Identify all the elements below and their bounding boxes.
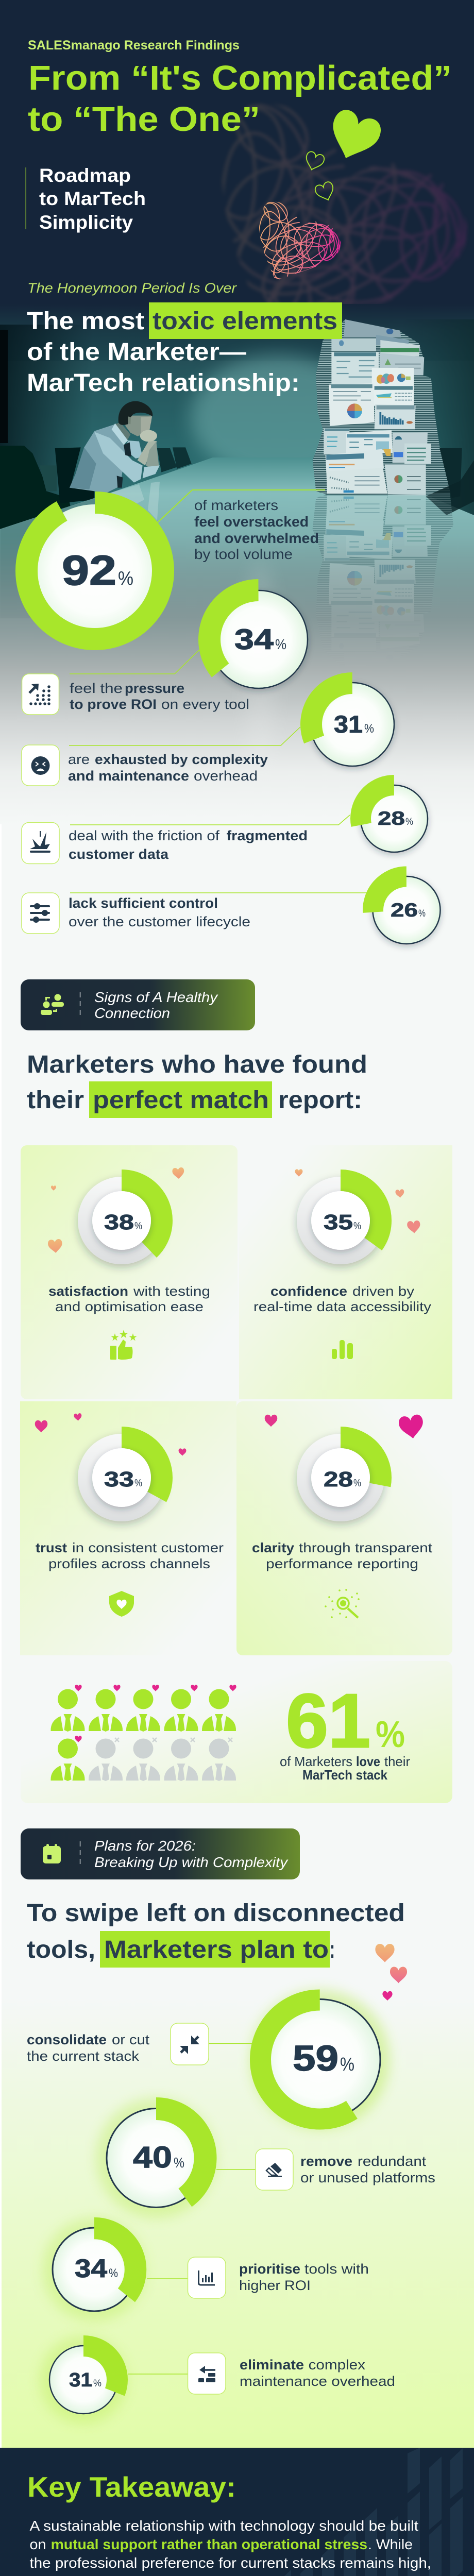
photo: overwhelmed marketer beside paper stack — [0, 304, 474, 824]
panel: 61 percent love their stack: 61 — [286, 1679, 370, 1764]
panel: key takeaway — [0, 2448, 474, 2576]
heading: toxic elements: MarTech relationship: — [27, 369, 300, 397]
stat: 34 percent pressure to prove ROI — [22, 570, 328, 715]
heading: swipe left: To swipe left on disconnected — [27, 1900, 405, 1927]
title: From “It's Complicated” — [28, 59, 452, 97]
stat: 59 percent consolidate: % — [340, 2054, 354, 2075]
section badge: plans for 2026: Plans for 2026: — [94, 1838, 196, 1854]
stat: 34 percent prioritise ROI: tools with — [304, 2261, 369, 2277]
takeaway text: on — [30, 2536, 46, 2552]
subtitle: roadmap: Roadmap — [39, 165, 131, 186]
icon: hearts illustration — [253, 107, 384, 290]
section badge: plans for 2026 — [21, 1828, 300, 1879]
icon: arrows inward — [171, 2023, 209, 2065]
stat: 92 percent: of marketers — [194, 497, 278, 513]
icon: bar chart — [332, 1340, 353, 1359]
icon: chart — [188, 2257, 226, 2298]
stat: 26 percent lack control: lack sufficient control — [69, 895, 218, 911]
panel: confidence 35 percent — [239, 1145, 452, 1399]
heading: toxic elements: The most — [27, 308, 144, 335]
stat: 28 percent fragmented data: % — [405, 817, 413, 827]
panel: 61 percent love their stack: love — [356, 1754, 380, 1769]
section badge: healthy connection: Signs of A Healthy — [94, 989, 218, 1005]
stat: 31 percent exhausted: are — [68, 752, 90, 767]
stat: 34 percent prioritise ROI: 34 — [75, 2254, 107, 2283]
stat: 92 percent: by tool volume — [194, 546, 293, 562]
panel: confidence 35 percent: % — [353, 1221, 361, 1232]
stat: 40 percent remove platforms: % — [174, 2155, 184, 2171]
stat: 59 percent consolidate: 59 — [293, 2038, 338, 2078]
panel: trust 33 percent: in consistent customer — [72, 1540, 224, 1555]
stat: 31 percent exhausted: % — [364, 722, 374, 736]
heading: swipe left: Marketers plan to — [104, 1936, 329, 1963]
stat: 34 percent pressure to prove ROI: to prove ROI — [70, 697, 157, 712]
panel: 61 percent love their stack — [21, 1661, 452, 1803]
stat: 31 percent eliminate overhead: maintenance overhead — [240, 2374, 395, 2389]
icon: thumbs up with stars — [110, 1330, 137, 1360]
stat: 31 percent eliminate overhead: % — [93, 2378, 101, 2389]
heading: swipe left — [27, 1900, 405, 1968]
illustration: man at table — [0, 401, 192, 531]
section badge: healthy connection — [21, 979, 255, 1030]
section badge: healthy connection: Connection — [94, 1005, 170, 1021]
stat: 31 percent eliminate overhead — [39, 2335, 395, 2424]
stat: 92 percent: feel overstacked — [194, 514, 309, 530]
panel: clarity 28 percent: through transparent — [299, 1540, 433, 1555]
stat: 92 percent: and overwhelmed — [194, 530, 319, 546]
heading: toxic elements: of the Marketer— — [27, 338, 246, 366]
stat: 92 percent — [27, 490, 325, 639]
panel: satisfaction 38 percent: with testing — [133, 1283, 210, 1299]
takeaway text: mutual support rather than operational stress — [51, 2536, 367, 2552]
panel: clarity 28 percent: 28 — [324, 1467, 353, 1491]
panel: satisfaction 38 percent: and optimisation ease — [55, 1299, 204, 1314]
stat: 92 percent: 92 — [62, 547, 116, 594]
title — [28, 59, 452, 139]
stat: 40 percent remove platforms: redundant — [358, 2154, 427, 2169]
panel: confidence 35 percent: real-time data accessibility — [253, 1299, 431, 1314]
section badge: plans for 2026: Breaking Up with Complexity — [94, 1854, 289, 1870]
stat: 34 percent pressure to prove ROI: feel the — [70, 681, 123, 696]
stat: 40 percent remove platforms: 40 — [133, 2141, 172, 2174]
pretitle: SALESmanago Research Findings — [28, 38, 240, 53]
panel: satisfaction 38 percent: satisfaction — [48, 1283, 128, 1299]
icon: floating hearts — [375, 1944, 407, 2001]
stat: 28 percent fragmented data: customer data — [69, 846, 169, 862]
panel: satisfaction 38 percent: % — [134, 1221, 142, 1232]
panel: trust 33 percent: % — [134, 1478, 142, 1489]
stat: 59 percent consolidate: consolidate — [27, 2032, 107, 2047]
stat: 31 percent exhausted: overhead — [194, 768, 258, 784]
icon: sliders — [22, 893, 59, 934]
subtitle: roadmap — [26, 165, 146, 233]
stat: 26 percent lack control: 26 — [391, 900, 418, 921]
stat: 31 percent eliminate overhead: eliminate — [240, 2357, 304, 2372]
stat: 31 percent exhausted: exhausted by complexity — [95, 752, 268, 767]
panel: trust 33 percent: 33 — [104, 1467, 134, 1491]
stat: 59 percent consolidate — [27, 1977, 402, 2142]
panel: trust 33 percent — [20, 1401, 236, 1655]
stat: 59 percent consolidate: the current stack — [27, 2048, 140, 2064]
icon: heart shield — [109, 1591, 134, 1617]
takeaway text: . While — [368, 2536, 413, 2552]
stat: 31 percent exhausted: and maintenance — [68, 768, 189, 784]
panel: clarity 28 percent: % — [353, 1478, 361, 1489]
panel: clarity 28 percent: clarity — [252, 1540, 295, 1555]
stat: 26 percent lack control — [22, 875, 442, 945]
icon: floating hearts — [295, 1169, 421, 1234]
stat: 28 percent fragmented data: 28 — [378, 808, 405, 829]
title: to “The One” — [28, 100, 260, 139]
heading: perfect match: perfect match — [93, 1087, 269, 1114]
panel: confidence 35 percent: confidence — [270, 1283, 347, 1299]
illustration: stack of reports — [313, 319, 474, 670]
heading: toxic elements: toxic elements — [153, 308, 337, 335]
heading: swipe left: : — [330, 1936, 335, 1963]
icon: exhausted face — [22, 745, 59, 786]
stat: 31 percent eliminate overhead: 31 — [69, 2369, 92, 2391]
stat: 31 percent eliminate overhead: complex — [309, 2357, 366, 2372]
icon: magnifier with dots — [325, 1589, 360, 1618]
icon: connected people — [41, 994, 64, 1015]
icon: eraser — [256, 2149, 293, 2190]
stat: 26 percent lack control: over the customer lifecycle — [69, 914, 250, 929]
section eyebrow: The Honeymoon Period Is Over — [27, 280, 237, 296]
panel: confidence 35 percent: driven by — [352, 1283, 414, 1299]
panel: clarity 28 percent — [236, 1401, 452, 1655]
icon: floating hearts — [265, 1414, 425, 1440]
heading: toxic elements — [27, 302, 342, 397]
icon: ROI arrow and dots — [22, 674, 59, 715]
heading: perfect match: Marketers who have found — [27, 1051, 367, 1078]
stat: 34 percent pressure to prove ROI: pressure — [125, 681, 184, 696]
stat: 34 percent pressure to prove ROI: on every tool — [161, 697, 249, 712]
stat: 92 percent: % — [118, 568, 133, 589]
icon: calendar — [43, 1844, 61, 1863]
takeaway text: A sustainable relationship with technology should be built — [30, 2518, 418, 2534]
panel: trust 33 percent: profiles across channels — [48, 1556, 210, 1571]
subtitle: roadmap: Simplicity — [39, 212, 133, 233]
stat: 34 percent prioritise ROI: higher ROI — [239, 2278, 311, 2293]
takeaway text: the professional preference for current stacks remains high, — [30, 2555, 431, 2571]
stat: 40 percent remove platforms: remove — [300, 2154, 352, 2169]
subtitle: roadmap: to MarTech — [39, 188, 146, 209]
stat: 28 percent fragmented data — [22, 779, 433, 863]
panel: key takeaway: Key Takeaway: — [27, 2471, 236, 2503]
takeaway text — [30, 2518, 431, 2576]
panel: trust 33 percent: trust — [36, 1540, 67, 1555]
heading: perfect match — [27, 1051, 367, 1118]
heading: swipe left: tools, — [27, 1936, 95, 1963]
stat: 26 percent lack control: % — [418, 908, 426, 919]
panel: confidence 35 percent: 35 — [324, 1210, 353, 1234]
panel: 61 percent love their stack: MarTech stack — [302, 1767, 387, 1783]
stat: 34 percent prioritise ROI: % — [109, 2266, 118, 2280]
icon: floating hearts — [35, 1413, 186, 1456]
panel: satisfaction 38 percent — [21, 1145, 238, 1399]
panel: clarity 28 percent: performance reporting — [266, 1556, 418, 1571]
stat: 34 percent prioritise ROI — [42, 2217, 369, 2321]
heading: perfect match: report: — [278, 1087, 362, 1114]
icon: floating hearts — [47, 1167, 185, 1253]
panel: satisfaction 38 percent: 38 — [104, 1210, 134, 1234]
stat: 28 percent fragmented data: fragmented — [227, 828, 308, 843]
heading: perfect match: their — [27, 1087, 84, 1114]
stat: 34 percent pressure to prove ROI: 34 — [234, 623, 274, 655]
illustration: boardroom table — [0, 457, 474, 670]
stat: 34 percent prioritise ROI: prioritise — [239, 2261, 300, 2277]
faded scribble heart background — [206, 90, 474, 367]
icon: friction burst — [22, 822, 59, 863]
stat: 40 percent remove platforms — [96, 2098, 435, 2218]
panel: 61 percent love their stack: of Marketers — [280, 1754, 352, 1769]
people pictogram — [50, 1685, 236, 1781]
stat: 31 percent exhausted — [22, 671, 406, 786]
stat: 59 percent consolidate: or cut — [112, 2032, 150, 2047]
stat: 31 percent exhausted: 31 — [334, 710, 363, 738]
stat: 40 percent remove platforms: or unused platforms — [300, 2170, 435, 2185]
panel: 61 percent love their stack: their — [384, 1754, 410, 1769]
panel: 61 percent love their stack: % — [376, 1714, 405, 1755]
icon: stack with arrow — [188, 2353, 226, 2394]
stat: 34 percent pressure to prove ROI: % — [275, 636, 286, 652]
stat: 28 percent fragmented data: deal with the friction of — [69, 828, 220, 843]
